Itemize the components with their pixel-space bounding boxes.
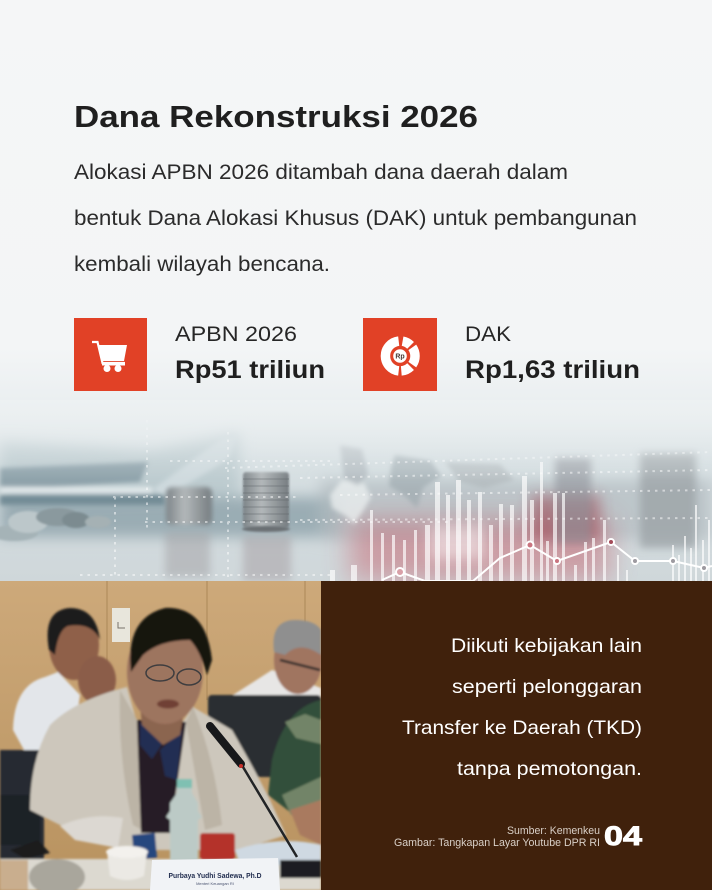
watch strap bbox=[132, 833, 157, 860]
policy text bbox=[402, 635, 642, 780]
label: DAK: DAK bbox=[465, 323, 511, 346]
value: Rp51 triliun: Rp51 triliun bbox=[175, 356, 325, 384]
table bbox=[0, 859, 321, 890]
soldier bbox=[268, 700, 321, 812]
label: APBN 2026: APBN 2026 bbox=[175, 323, 297, 346]
source credit: Gambar: Tangkapan Layar Youtube DPR RI bbox=[394, 837, 600, 849]
intro paragraph: Alokasi APBN 2026 ditambah dana daerah dalam bbox=[74, 161, 568, 184]
coin stack sharp bbox=[242, 472, 290, 532]
phone bbox=[12, 841, 51, 858]
policy text: Transfer ke Daerah (TKD) bbox=[402, 717, 642, 739]
intro paragraph: kembali wilayah bencana. bbox=[74, 253, 330, 276]
chairs bbox=[208, 695, 321, 777]
photo: minister speaking at hearing bbox=[0, 581, 322, 890]
stat: DAK bbox=[363, 318, 640, 391]
right blurred stacks bbox=[555, 453, 696, 548]
bottle bbox=[166, 779, 202, 861]
icon: rupiah donut chart bbox=[363, 318, 437, 391]
world map bbox=[330, 445, 514, 524]
intro paragraph: bentuk Dana Alokasi Khusus (DAK) untuk pembangunan bbox=[74, 207, 637, 230]
page number: 04 bbox=[604, 821, 642, 851]
panel: policy note bbox=[321, 581, 712, 890]
coin stack blurred bbox=[166, 487, 212, 525]
background man left bbox=[13, 672, 80, 750]
dotted grid bbox=[80, 432, 710, 577]
policy text: tanpa pemotongan. bbox=[457, 758, 642, 780]
neck and head bbox=[140, 712, 184, 746]
line chart bbox=[382, 539, 712, 581]
policy text: Diikuti kebijakan lain bbox=[451, 635, 642, 657]
background man right bbox=[233, 670, 321, 700]
glasses bbox=[146, 665, 201, 685]
source credit: Sumber: Kemenkeu bbox=[507, 825, 600, 837]
intro paragraph bbox=[74, 161, 637, 276]
coins: flat pile bbox=[0, 508, 111, 541]
value: Rp1,63 triliun: Rp1,63 triliun bbox=[465, 356, 640, 384]
title: Dana Rekonstruksi 2026 bbox=[74, 99, 478, 134]
policy text: seperti pelonggaran bbox=[452, 676, 642, 698]
batik shirt bbox=[137, 720, 186, 833]
microphone bbox=[242, 766, 298, 858]
nameplate: Menteri Keuangan RI bbox=[196, 881, 234, 886]
finance background image: coins, keyboard and charts bbox=[0, 428, 712, 581]
nameplate bbox=[150, 858, 280, 890]
red glow bbox=[350, 520, 610, 581]
jacket bbox=[30, 687, 286, 850]
background panel bbox=[0, 0, 712, 581]
cup bbox=[107, 852, 147, 880]
source credit bbox=[394, 825, 600, 849]
keyboard bbox=[0, 446, 229, 508]
nameplate: Purbaya Yudhi Sadewa, Ph.D bbox=[168, 871, 262, 880]
icon: shopping cart bbox=[74, 318, 147, 391]
bar chart bbox=[330, 462, 710, 581]
red can bbox=[200, 833, 235, 860]
stat: APBN 2026 bbox=[74, 318, 325, 391]
icon: rupiah donut chart: Rp bbox=[395, 354, 405, 360]
